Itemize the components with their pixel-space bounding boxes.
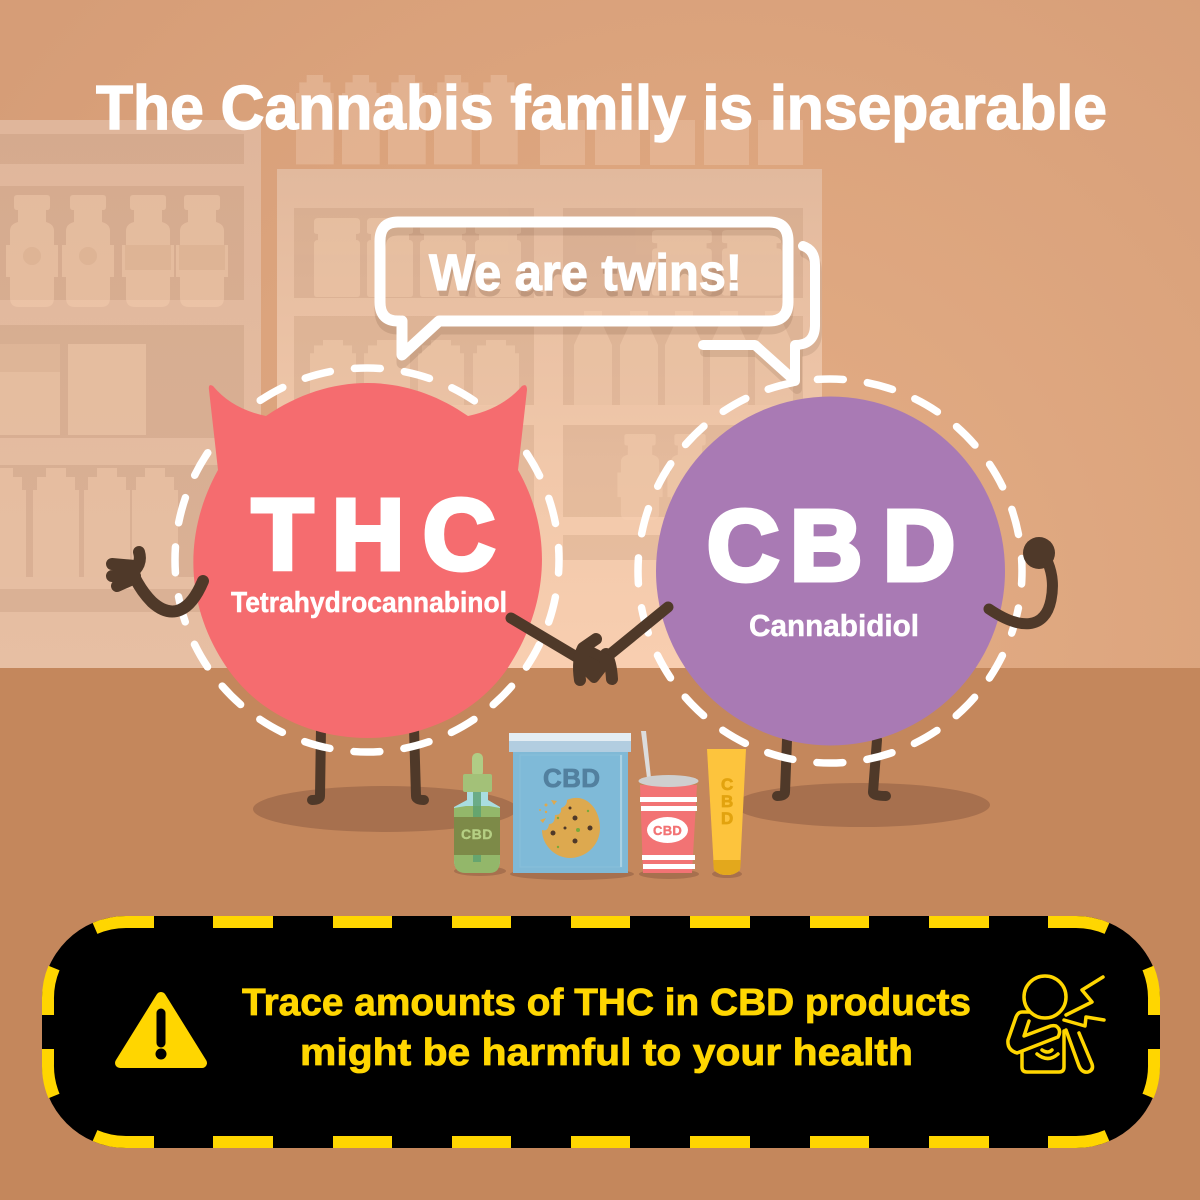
left shelf unit [0,120,261,668]
full name: Tetrahydrocannabinol [231,587,507,619]
product: CBD tube: B [721,792,733,811]
body [656,396,1005,746]
background: shop shelves [0,75,822,668]
dashed border [48,922,1154,1142]
title: The Cannabis family is inseparable [96,74,1107,143]
legs [312,728,424,800]
shelf panels [0,134,803,612]
floor [0,668,1200,1200]
dashed ring [638,379,1022,763]
CBD label: CBD [707,490,955,602]
speech bubble: THC [380,222,788,363]
character: THC [112,368,559,800]
THC label: THC [252,479,495,591]
speech bubbles [380,222,817,389]
product: CBD tube: D [721,809,733,828]
product: CBD drink cup [638,731,699,879]
product: CBD cookie tin [509,733,634,880]
product: CBD cookie tin: CBD [543,763,600,793]
cookie [539,798,600,858]
background [0,0,1200,670]
warning banner [42,916,1160,1148]
speech text: We are twins! [429,244,742,301]
legs [777,740,886,796]
top shelf bottles [296,75,803,165]
label details on shelved products [0,245,225,372]
icon: warning triangle [120,997,202,1063]
product: CBD dropper bottle [454,753,506,876]
warning text: might be harmful to your health [300,1032,913,1074]
shadow: THC [253,786,517,832]
product: CBD drink cup: CBD [653,823,682,838]
speech text: We are twins! [431,250,742,307]
banner background [42,916,1160,1148]
left arm with hand [112,552,203,611]
full name: Cannabidiol [749,608,919,643]
right arm with fist [989,537,1055,624]
shelved products [0,195,793,577]
character: CBD [638,379,1055,796]
warning text: Trace amounts of THC in CBD products [242,982,971,1024]
right shelf unit [277,169,822,668]
shadow: CBD [734,783,990,827]
product: CBD dropper bottle: CBD [461,826,493,842]
icon: person with chest pain [1008,976,1104,1072]
devil body [193,383,542,738]
product: CBD tube [707,749,746,878]
dashed ring [175,368,559,752]
product: CBD tube: C [721,775,733,794]
products [454,731,746,880]
holding hands [511,607,668,680]
speech bubble: CBD [703,246,817,389]
warning text [242,982,971,1074]
